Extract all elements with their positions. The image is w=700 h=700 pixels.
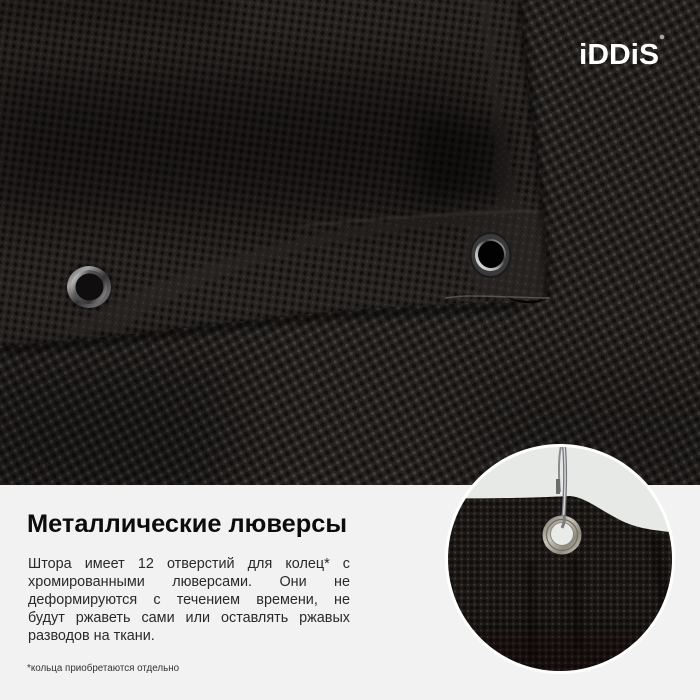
large tonal shading	[0, 0, 700, 510]
body text: Штора имеет 12 отверстий для колец* с	[28, 556, 350, 572]
body text: хромированными люверсами. Они не	[28, 574, 350, 590]
body text: деформируются с течением времени, не	[28, 592, 350, 608]
close-up grommet	[542, 515, 582, 554]
body text	[28, 556, 350, 644]
logo: iDDiS	[581, 34, 664, 64]
close-up curtain fabric	[448, 496, 672, 671]
light fold strip and curtain hem	[0, 0, 550, 350]
title: Металлические люверсы	[27, 510, 347, 538]
close-up steel ring hook	[556, 446, 565, 522]
lower and right curtain panel	[0, 0, 700, 485]
grommet: right	[470, 232, 512, 278]
logo: iDDiS: iDDiS	[579, 39, 659, 71]
body text: будут ржаветь сами или оставлять ржавых	[28, 610, 350, 626]
grommet: left	[66, 265, 112, 309]
footnote: *кольца приобретаются отдельно	[27, 663, 179, 674]
body text: разводов на ткани.	[28, 628, 155, 644]
inset circle: grommet close-up with ring	[445, 444, 675, 674]
